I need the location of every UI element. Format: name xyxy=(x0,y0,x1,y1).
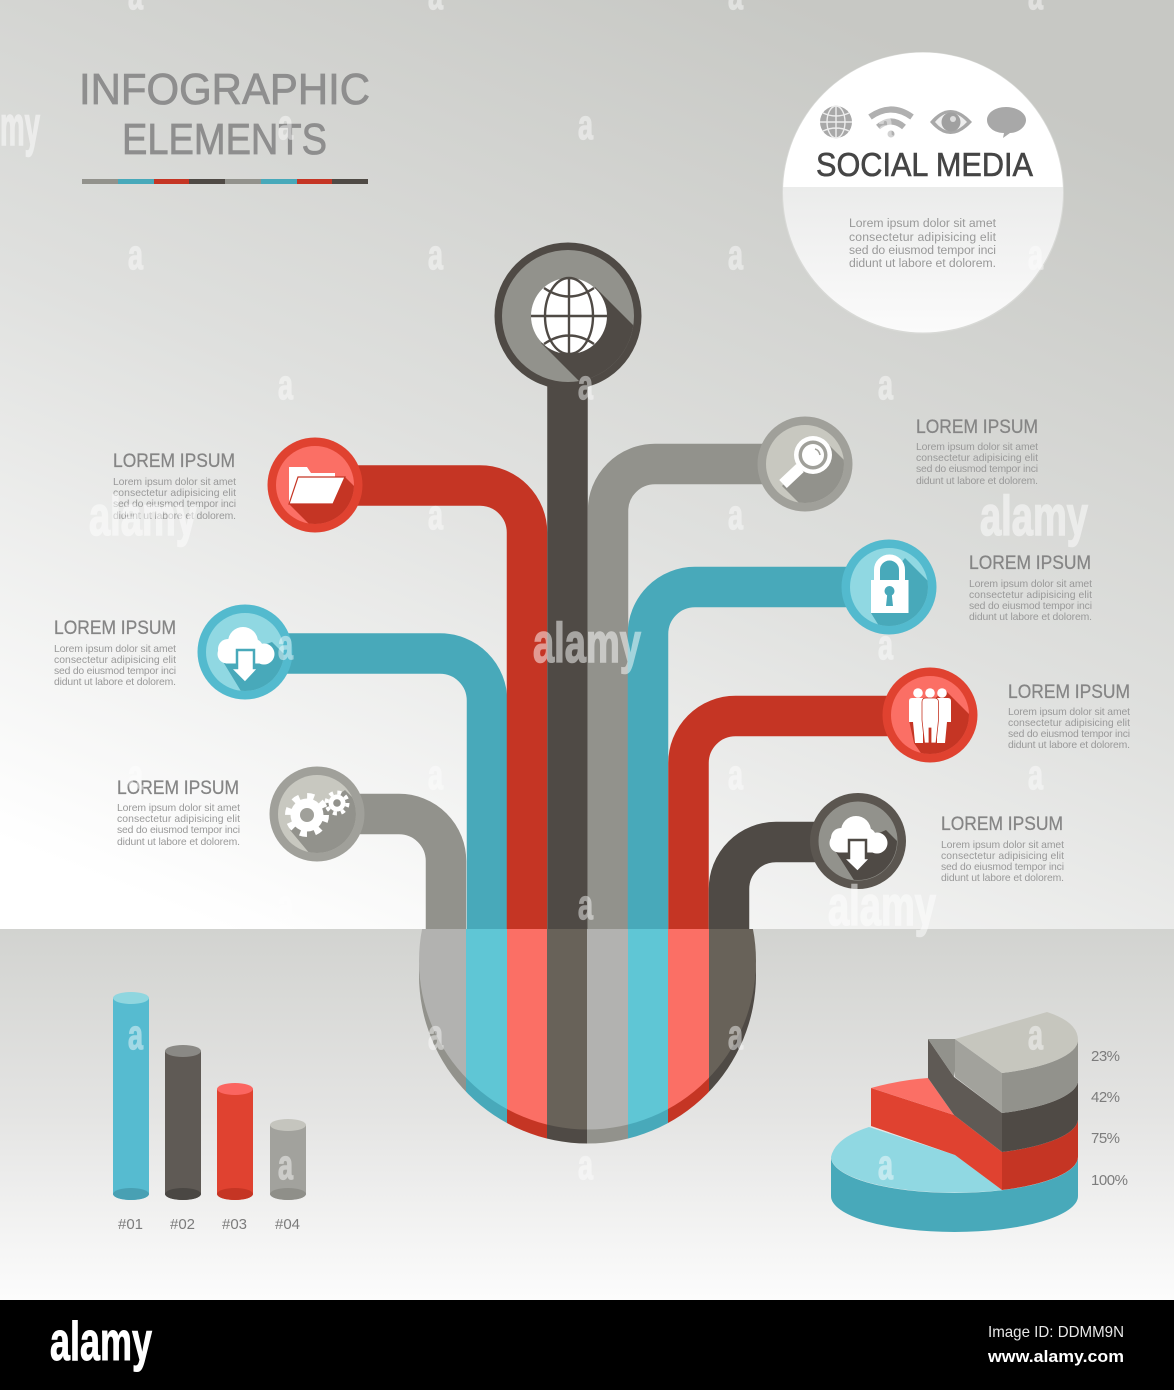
watermarks: a xyxy=(578,361,593,408)
footer url: www.alamy.com xyxy=(987,1347,1124,1366)
pie layer: 75% red xyxy=(871,1078,1078,1190)
pipe: teal right xyxy=(648,587,889,930)
watermarks: a xyxy=(728,1011,743,1058)
label: cloud right: LOREM IPSUM xyxy=(941,814,1063,835)
title: ELEMENTS xyxy=(122,115,327,164)
watermarks: a xyxy=(428,1011,443,1058)
watermarks: alamy xyxy=(980,484,1088,547)
watermarks: alamy xyxy=(533,611,641,674)
pie layer: 42% dark xyxy=(928,1039,1078,1152)
pipe: gray left xyxy=(317,814,446,930)
bar chart xyxy=(113,992,306,1233)
icon: speech bubble xyxy=(987,107,1026,138)
label: gears xyxy=(117,778,240,848)
social media text: sed do eiusmod tempor inci xyxy=(849,243,996,257)
icon: gears xyxy=(270,766,364,862)
pipe: dark right xyxy=(729,842,858,930)
pipe: teal left xyxy=(245,654,487,930)
label: people: didunt ut labore et dolorem. xyxy=(1008,740,1130,751)
footer logo: alamy xyxy=(50,1310,152,1372)
stacked pie chart xyxy=(831,1012,1128,1232)
label: people xyxy=(1008,682,1130,751)
label: padlock: didunt ut labore et dolorem. xyxy=(969,612,1092,623)
watermarks: a xyxy=(728,491,743,538)
label: folder xyxy=(113,451,236,522)
title xyxy=(79,65,370,164)
label: folder: sed do eiusmod tempor inci xyxy=(113,499,236,510)
watermarks: a xyxy=(278,881,293,928)
label: gears: Lorem ipsum dolor sit amet xyxy=(117,803,240,814)
pipe: red right xyxy=(688,716,930,930)
pipe: red left xyxy=(315,486,527,930)
watermarks: a xyxy=(428,231,443,278)
bar labels xyxy=(118,1216,300,1233)
title: INFOGRAPHIC xyxy=(79,65,370,114)
watermarks: a xyxy=(878,621,893,668)
label: cloud left: LOREM IPSUM xyxy=(54,618,176,639)
pie labels: 42% xyxy=(1091,1089,1120,1106)
watermarks: a xyxy=(578,881,593,928)
label: cloud right: consectetur adipisicing elit xyxy=(941,851,1064,862)
label: folder: didunt ut labore et dolorem. xyxy=(113,511,236,522)
label: padlock: sed do eiusmod tempor inci xyxy=(969,601,1092,612)
icon: wifi xyxy=(870,110,912,138)
pipe: gray right xyxy=(608,464,805,930)
label: magnifier: Lorem ipsum dolor sit amet xyxy=(916,442,1038,453)
watermarks: my xyxy=(0,94,40,157)
icon: padlock xyxy=(842,540,936,634)
bar #04 xyxy=(270,1119,306,1200)
bar labels: #03 xyxy=(222,1216,247,1233)
watermarks: a xyxy=(1028,751,1043,798)
icon: eye xyxy=(930,110,972,134)
label: cloud left: didunt ut labore et dolorem. xyxy=(54,677,176,688)
bar labels: #02 xyxy=(170,1216,195,1233)
icon: globe small xyxy=(820,106,852,138)
label: folder: consectetur adipisicing elit xyxy=(113,488,236,499)
icon: cloud download left xyxy=(198,604,292,700)
label: magnifier: LOREM IPSUM xyxy=(916,417,1038,438)
bar #03 xyxy=(217,1083,253,1200)
pipe: center dark xyxy=(547,316,588,930)
label: gears: consectetur adipisicing elit xyxy=(117,814,240,825)
label: gears: LOREM IPSUM xyxy=(117,778,239,799)
bar labels: #04 xyxy=(275,1216,300,1233)
watermarks: alamy xyxy=(89,484,197,547)
watermarks: a xyxy=(278,621,293,668)
watermarks: a xyxy=(728,231,743,278)
label: padlock: LOREM IPSUM xyxy=(969,553,1091,574)
watermarks: a xyxy=(278,101,293,148)
label: padlock: consectetur adipisicing elit xyxy=(969,590,1092,601)
label: cloud right: sed do eiusmod tempor inci xyxy=(941,862,1064,873)
watermarks: a xyxy=(128,751,143,798)
watermarks: a xyxy=(878,101,893,148)
watermarks: alamy xyxy=(828,874,936,937)
pie labels: 75% xyxy=(1091,1130,1120,1147)
social media text xyxy=(849,216,997,270)
watermarks: a xyxy=(278,1141,293,1188)
panel: social media xyxy=(782,52,1064,334)
bowl xyxy=(419,929,756,1149)
watermarks: a xyxy=(428,751,443,798)
bar #02 xyxy=(165,1045,201,1200)
social media text: Lorem ipsum dolor sit amet xyxy=(849,216,997,230)
watermarks: a xyxy=(1028,1011,1043,1058)
watermarks: a xyxy=(128,1011,143,1058)
label: gears: didunt ut labore et dolorem. xyxy=(117,837,240,848)
bar #01 xyxy=(113,992,149,1200)
watermarks: a xyxy=(728,751,743,798)
pie labels: 23% xyxy=(1091,1048,1120,1065)
social media text: consectetur adipisicing elit xyxy=(849,230,997,244)
pie labels xyxy=(1091,1048,1128,1189)
label: magnifier: consectetur adipisicing elit xyxy=(916,453,1038,464)
watermarks: a xyxy=(428,491,443,538)
label: padlock xyxy=(969,553,1092,623)
pipes xyxy=(245,316,930,930)
background floor xyxy=(0,929,1174,1300)
watermarks: a xyxy=(578,101,593,148)
label: people: consectetur adipisicing elit xyxy=(1008,718,1130,729)
watermarks: a xyxy=(1028,231,1043,278)
footer image id: Image ID: DDMM9N xyxy=(988,1324,1124,1341)
watermarks: a xyxy=(878,1141,893,1188)
label: padlock: Lorem ipsum dolor sit amet xyxy=(969,579,1092,590)
label: cloud right xyxy=(941,814,1064,884)
icon: magnifier xyxy=(758,416,852,512)
pie layer: 100% teal xyxy=(831,1127,1078,1232)
label: cloud left: consectetur adipisicing elit xyxy=(54,655,176,666)
social media heading: SOCIAL MEDIA xyxy=(816,146,1033,183)
label: folder: LOREM IPSUM xyxy=(113,451,235,472)
label: cloud left: Lorem ipsum dolor sit amet xyxy=(54,644,176,655)
social media text: didunt ut labore et dolorem. xyxy=(849,256,996,270)
title underline xyxy=(82,179,368,184)
pie labels: 100% xyxy=(1091,1172,1128,1189)
watermarks: a xyxy=(278,361,293,408)
pie layer: 23% gray xyxy=(955,1012,1078,1113)
label: magnifier: sed do eiusmod tempor inci xyxy=(916,464,1038,475)
label: folder: Lorem ipsum dolor sit amet xyxy=(113,477,236,488)
icon: people xyxy=(882,668,978,762)
watermarks: a xyxy=(128,231,143,278)
watermarks: a xyxy=(878,361,893,408)
label: gears: sed do eiusmod tempor inci xyxy=(117,825,240,836)
background wall xyxy=(0,0,1174,929)
label: people: LOREM IPSUM xyxy=(1008,682,1130,703)
label: cloud right: Lorem ipsum dolor sit amet xyxy=(941,840,1064,851)
label: magnifier xyxy=(916,417,1038,487)
icon: cloud download right xyxy=(810,793,906,889)
label: cloud left xyxy=(54,618,176,688)
icon: folder xyxy=(268,438,362,532)
icon: globe xyxy=(494,242,642,387)
label: people: Lorem ipsum dolor sit amet xyxy=(1008,707,1130,718)
label: people: sed do eiusmod tempor inci xyxy=(1008,729,1130,740)
label: magnifier: didunt ut labore et dolorem. xyxy=(916,476,1038,487)
bar labels: #01 xyxy=(118,1216,143,1233)
watermarks xyxy=(0,0,1088,1188)
label: cloud left: sed do eiusmod tempor inci xyxy=(54,666,176,677)
watermarks: a xyxy=(578,1141,593,1188)
footer bar xyxy=(0,1300,1174,1390)
label: cloud right: didunt ut labore et dolorem. xyxy=(941,873,1064,884)
